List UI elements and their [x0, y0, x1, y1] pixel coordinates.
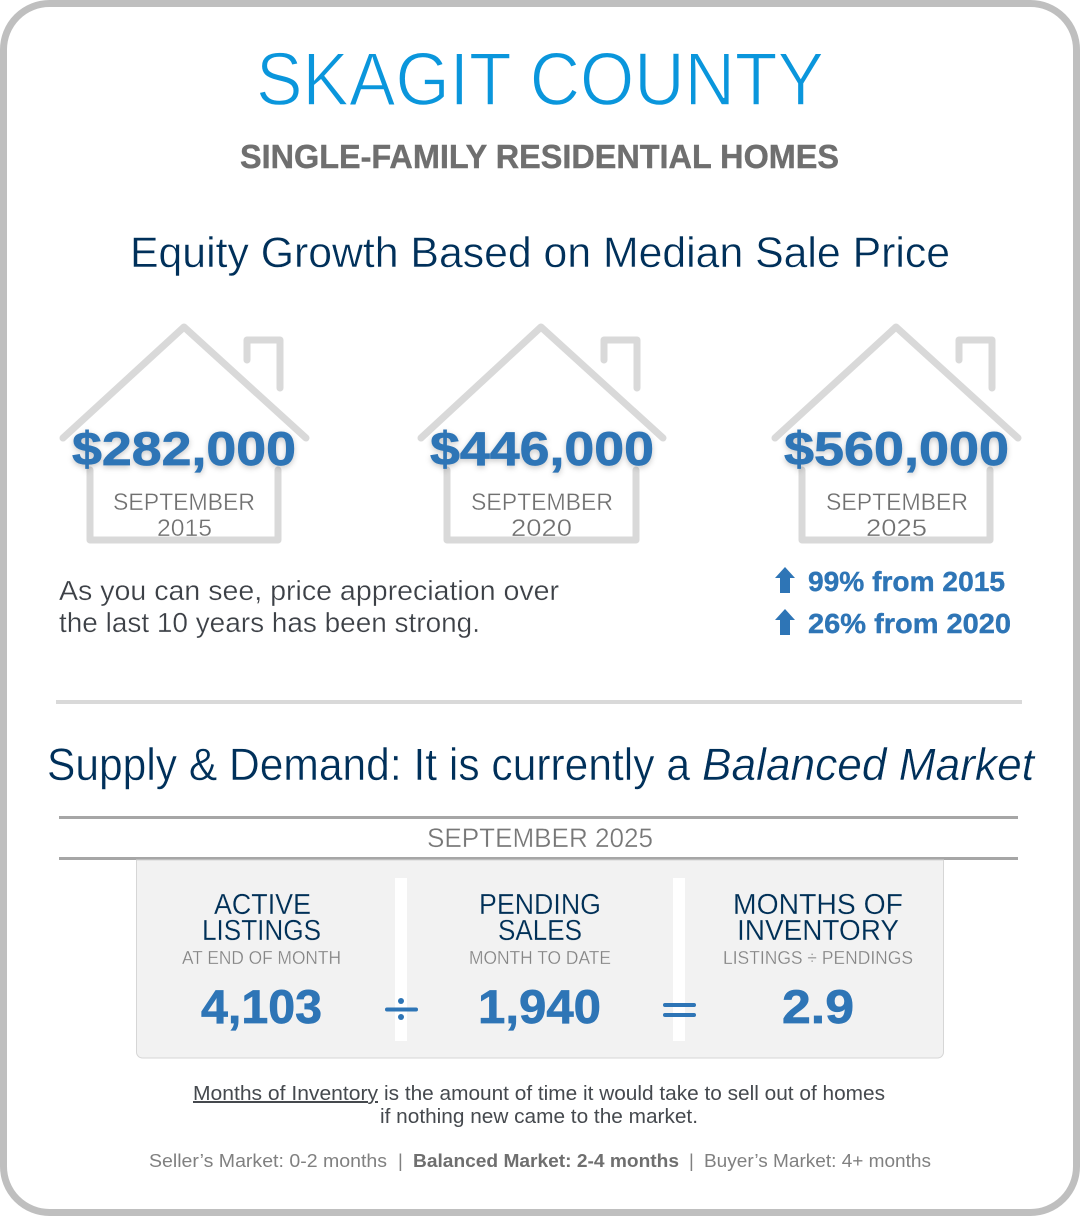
- icon: up arrow 2015: [775, 567, 795, 593]
- subtitle: SINGLE-FAMILY RESIDENTIAL HOMES: [240, 138, 839, 175]
- stat: active listings: 4,103: [201, 980, 322, 1033]
- stat: months of inventory: MONTHS OF: [733, 889, 903, 921]
- date 2025: [826, 489, 968, 542]
- text block: appreciation note: the last 10 years has been strong.: [59, 607, 480, 638]
- market legend: [149, 1150, 931, 1171]
- stat: months of inventory: [723, 889, 913, 1033]
- heading: equity growth: Equity Growth Based on Median Sale Price: [130, 229, 950, 277]
- price 2025: $560,000: [784, 422, 1009, 475]
- price 2020: $446,000: [430, 422, 654, 475]
- icon: divide sign: [385, 998, 418, 1020]
- stat: pending sales: SALES: [498, 915, 582, 947]
- market legend: Buyer’s Market: 4+ months: [704, 1150, 931, 1171]
- price 2015: $282,000: [72, 422, 296, 475]
- date 2020: 2020: [511, 515, 572, 542]
- stat: active listings: ACTIVE: [214, 889, 311, 921]
- stat: pending sales: PENDING: [479, 889, 601, 921]
- date 2015: 2015: [157, 515, 212, 542]
- text block: appreciation note: [59, 575, 559, 638]
- market legend: |: [689, 1150, 694, 1171]
- market legend: Balanced Market: 2-4 months: [413, 1150, 679, 1171]
- icon: house 2025: [775, 327, 1018, 540]
- stat: pending sales: [469, 889, 611, 1033]
- title: SKAGIT COUNTY: [256, 37, 824, 121]
- date 2015: SEPTEMBER: [113, 489, 255, 516]
- icon: up arrow 2020: [775, 609, 795, 635]
- heading: supply and demand: Supply & Demand: It is currently a: [47, 739, 691, 790]
- stat: months of inventory: 2.9: [782, 980, 854, 1033]
- heading: supply and demand: Balanced Market: [702, 739, 1036, 790]
- text block: appreciation note: As you can see, price appreciation over: [59, 575, 559, 606]
- month label: SEPTEMBER 2025: [427, 823, 653, 853]
- text block: months of inventory definition: if nothing new came to the market.: [380, 1106, 698, 1128]
- stat: pending sales: 1,940: [478, 980, 601, 1033]
- market legend: |: [398, 1150, 403, 1171]
- market legend: Seller’s Market: 0-2 months: [149, 1150, 387, 1171]
- date 2020: [471, 489, 613, 542]
- stat: active listings: AT END OF MONTH: [182, 948, 341, 968]
- icon: house 2015: [63, 327, 306, 540]
- text block: months of inventory definition: [193, 1083, 885, 1128]
- stat: active listings: LISTINGS: [202, 915, 321, 947]
- heading: supply and demand: [47, 739, 1036, 790]
- stat: 99% from 2015: 99% from 2015: [808, 566, 1005, 597]
- panel: 2020 house: [421, 327, 663, 542]
- stat: months of inventory: INVENTORY: [737, 915, 899, 947]
- text block: months of inventory definition: is the amount of time it would take to sell out of homes: [384, 1083, 885, 1105]
- stat: active listings: [182, 889, 341, 1033]
- panel: 2015 house: [63, 327, 306, 542]
- date 2020: SEPTEMBER: [471, 489, 613, 516]
- icon: equals sign: [663, 1003, 696, 1017]
- date 2025: SEPTEMBER: [826, 489, 968, 516]
- panel: market stats: [136, 860, 944, 1058]
- stat: pending sales: MONTH TO DATE: [469, 948, 611, 968]
- stat: 26% from 2020: 26% from 2020: [808, 608, 1011, 639]
- panel: 2025 house: [775, 327, 1018, 542]
- date 2015: [113, 489, 255, 542]
- text block: months of inventory definition: Months of Inventory: [193, 1083, 378, 1105]
- date 2025: 2025: [866, 515, 927, 542]
- stat: months of inventory: LISTINGS ÷ PENDINGS: [723, 948, 913, 968]
- icon: house 2020: [421, 327, 663, 540]
